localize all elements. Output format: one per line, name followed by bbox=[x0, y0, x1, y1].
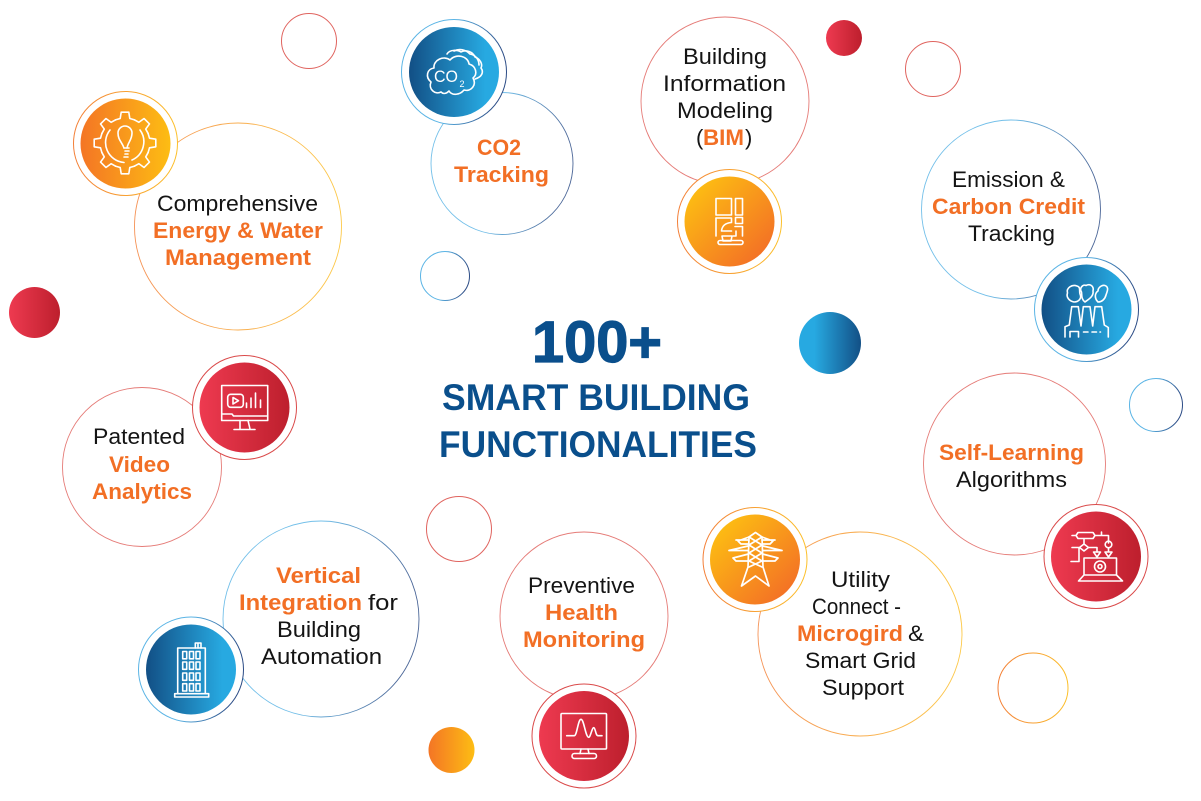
text: CO2 tracking: CO2 bbox=[477, 135, 521, 160]
icon: CO2 cloud bbox=[402, 20, 506, 124]
text: preventive bbox=[523, 573, 645, 652]
heading: smart building functionalities: SMART BUILDING bbox=[442, 377, 750, 418]
panel: self-learning algorithms bbox=[924, 373, 1148, 608]
text: self-learning bbox=[939, 440, 1084, 492]
icon: CO2 cloud: 2 bbox=[460, 79, 465, 89]
text: utility connect: Connect - bbox=[812, 594, 901, 619]
text: utility connect: Utility bbox=[831, 567, 890, 592]
text: preventive: Preventive bbox=[528, 573, 635, 598]
panel: emission and carbon credit tracking bbox=[922, 120, 1138, 362]
heading: smart building functionalities: FUNCTIONALITIES bbox=[439, 424, 757, 465]
text: self-learning: Algorithms bbox=[956, 467, 1067, 492]
text: vertical integration bbox=[239, 563, 398, 669]
text: BIM bbox=[663, 44, 786, 150]
text: energy and water: Energy & Water bbox=[153, 218, 323, 243]
text: CO2 tracking: Tracking bbox=[454, 162, 549, 187]
text: emission: Tracking bbox=[968, 221, 1055, 246]
text: vertical integration: Automation bbox=[261, 644, 382, 669]
title: 100+: 100+ bbox=[532, 310, 662, 375]
panel: patented video analytics bbox=[62, 356, 296, 546]
text: vertical integration: Building bbox=[277, 617, 361, 642]
text: BIM: ) bbox=[745, 125, 752, 150]
text: vertical integration: Vertical bbox=[276, 563, 361, 588]
text: BIM: BIM bbox=[703, 125, 744, 150]
icon: transmission tower bbox=[703, 508, 807, 612]
text: preventive: Health bbox=[545, 600, 618, 625]
text: utility connect: Support bbox=[822, 675, 904, 700]
icon: health monitor bbox=[532, 684, 636, 788]
text: video analytics bbox=[92, 424, 192, 504]
panel: building information modeling bbox=[641, 17, 809, 274]
text: vertical integration: Integration bbox=[239, 590, 362, 615]
text: utility connect bbox=[797, 567, 924, 700]
icon: flow chart laptop bbox=[1044, 504, 1148, 608]
text: self-learning: Self-Learning bbox=[939, 440, 1084, 465]
text: video analytics: Analytics bbox=[92, 479, 192, 504]
text: preventive: Monitoring bbox=[523, 627, 645, 652]
icon: CO2 cloud: CO bbox=[434, 67, 458, 86]
icon: office building bbox=[138, 617, 244, 722]
decorative filled circles bbox=[9, 20, 862, 773]
panel: preventive health monitoring bbox=[500, 532, 668, 788]
text: video analytics: Patented bbox=[93, 424, 185, 449]
heading: smart building functionalities bbox=[439, 377, 757, 465]
text: BIM: ( bbox=[696, 125, 704, 150]
panel: CO2 tracking bbox=[402, 20, 573, 234]
text: utility connect: & bbox=[908, 621, 924, 646]
text: energy and water bbox=[153, 191, 323, 270]
text: video analytics: Video bbox=[109, 452, 170, 477]
text: emission: Emission & bbox=[952, 167, 1065, 192]
text: energy and water: Management bbox=[165, 245, 312, 270]
panel: vertical integration bbox=[138, 521, 419, 722]
decorative outlined circles bbox=[282, 14, 1182, 723]
icon: gear with bulb bbox=[74, 92, 178, 196]
text: BIM: Building bbox=[683, 44, 767, 69]
text: utility connect: Smart Grid bbox=[805, 648, 916, 673]
text: energy and water: Comprehensive bbox=[157, 191, 318, 216]
text: emission: Carbon Credit bbox=[932, 194, 1086, 219]
icon: building plan bbox=[678, 170, 782, 274]
panel: energy and water management bbox=[74, 92, 342, 330]
text: utility connect: Microgird bbox=[797, 621, 903, 646]
panel: utility connect bbox=[703, 508, 962, 736]
icon: factory chimneys bbox=[1034, 258, 1138, 362]
text: BIM: Information bbox=[663, 71, 786, 96]
text: emission bbox=[932, 167, 1086, 246]
text: CO2 tracking bbox=[454, 135, 549, 187]
icon: video monitor bbox=[192, 356, 296, 460]
text: vertical integration: for bbox=[368, 590, 398, 615]
text: BIM: Modeling bbox=[677, 98, 773, 123]
